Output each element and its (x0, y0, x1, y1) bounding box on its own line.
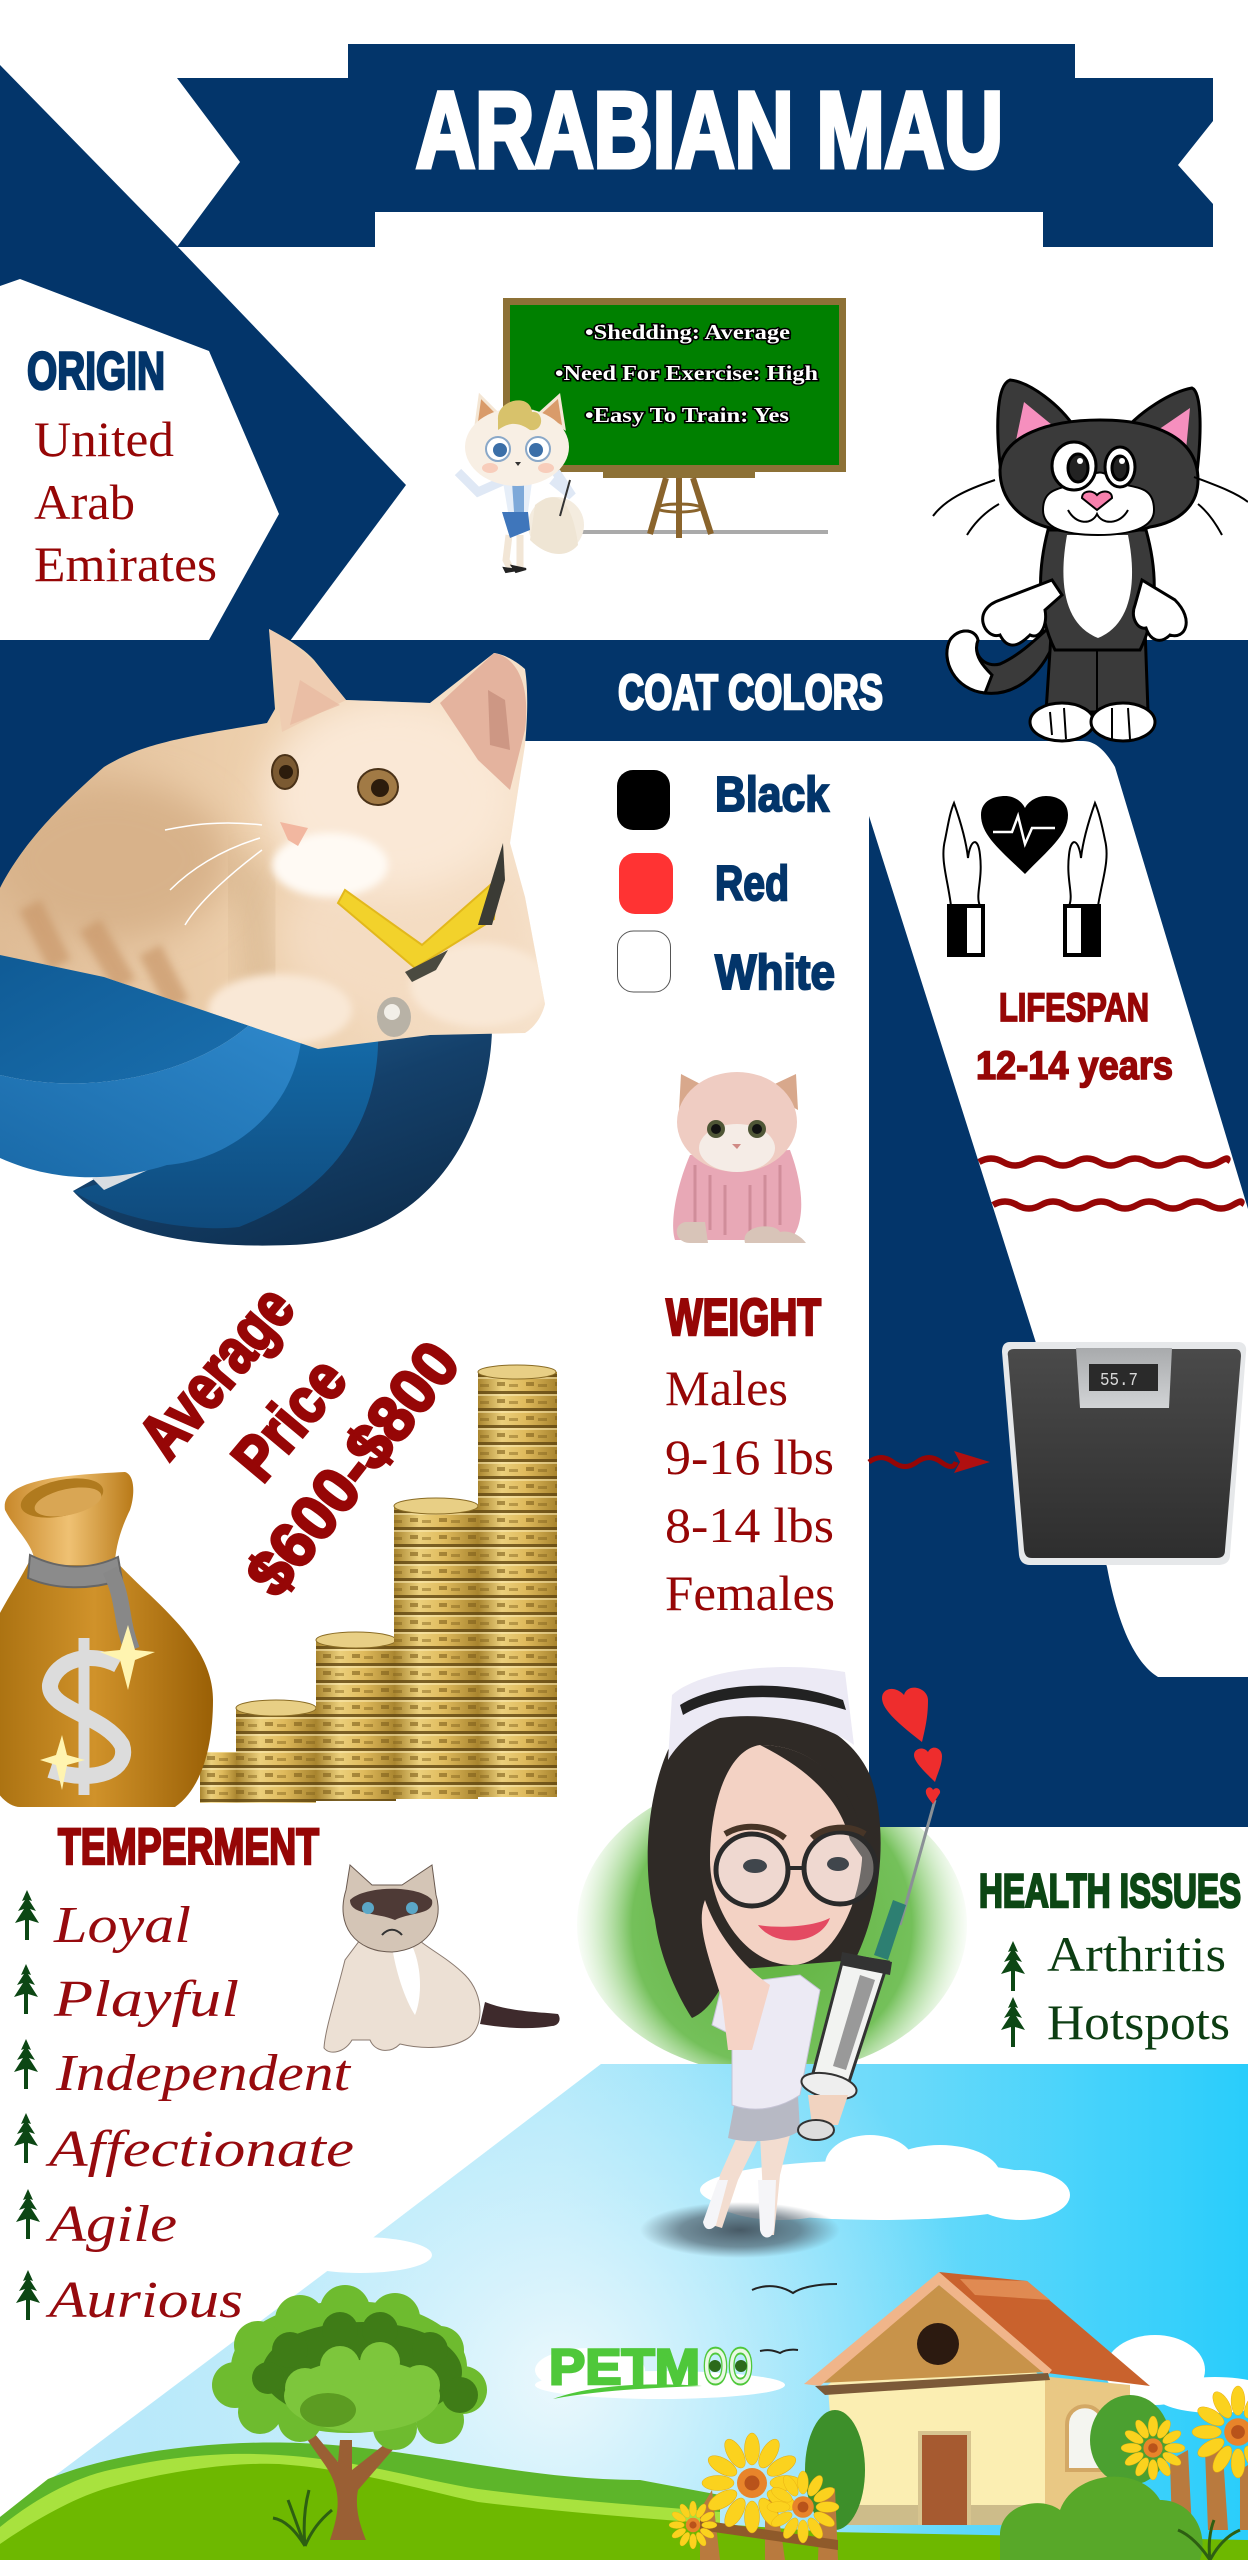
left hand (943, 803, 981, 906)
right hand (1068, 803, 1107, 906)
temperament list: Playful (53, 1971, 239, 2028)
money bag (0, 1472, 213, 1807)
easel (573, 469, 828, 538)
weight text: 8-14 lbs (665, 1497, 834, 1553)
coin stacks (200, 1365, 557, 1803)
eyes (1052, 442, 1096, 490)
temperament list: Aurious (45, 2272, 243, 2329)
head (1000, 420, 1198, 533)
logo (549, 2338, 753, 2399)
temperament list: Affectionate (45, 2121, 354, 2178)
bell (377, 997, 411, 1037)
origin heading: ORIGIN (27, 342, 165, 401)
average price text: Price (218, 1344, 360, 1494)
black and white cartoon cat (933, 380, 1248, 741)
kitten soft fur shading (0, 697, 550, 1046)
logo swoosh (553, 2384, 702, 2399)
lips (758, 1918, 830, 1940)
origin value: United (34, 411, 174, 467)
navy chevron background: origin (0, 65, 406, 645)
legs (1046, 600, 1148, 712)
title banner (177, 44, 1213, 247)
collar (338, 880, 496, 968)
torso (1041, 530, 1154, 650)
pine bullets (14, 1890, 40, 2320)
whiskers (933, 477, 1248, 535)
scale readout: 55.7 (1100, 1371, 1138, 1391)
sparkles (100, 1625, 155, 1690)
tree (212, 2285, 487, 2546)
lifespan text: LIFESPAN (999, 986, 1149, 1030)
title: ARABIAN MAU (416, 69, 1003, 190)
syringe (798, 1800, 935, 2140)
clouds (288, 2135, 1248, 2413)
dollar sign (50, 1658, 123, 1776)
hearts (882, 1688, 928, 1742)
heart (981, 796, 1068, 874)
average price text (124, 1272, 473, 1609)
white origin panel (0, 279, 279, 640)
sky background (0, 2064, 1248, 2560)
lifespan text (976, 986, 1173, 1088)
navy right panel (869, 741, 1248, 1827)
board text (555, 320, 818, 427)
swatch labels: White (715, 946, 835, 1000)
door (918, 2431, 971, 2525)
weight text (665, 1289, 835, 1621)
average price text: $600-$800 (232, 1328, 473, 1609)
blue sphere (0, 940, 492, 1246)
bathroom scale (1002, 1342, 1246, 1565)
rope (28, 1555, 122, 1587)
trunk (297, 2422, 396, 2540)
wavy arrow to scale (869, 1451, 990, 1473)
pine bullets (1001, 1941, 1025, 2047)
wavy dividers (979, 1158, 1227, 1166)
grumpy cat (324, 1865, 560, 2052)
gable (820, 2285, 1047, 2383)
tail (947, 622, 1055, 693)
crown light (212, 2285, 487, 2450)
white swatch (618, 931, 670, 992)
orange kitten photo (0, 629, 550, 1049)
glasses (716, 1834, 788, 1906)
crown mid (284, 2342, 440, 2432)
pink sweater kitten (673, 1072, 806, 1243)
daisies (669, 2386, 1248, 2549)
legs (712, 2130, 760, 2228)
kitten ears (269, 629, 346, 732)
board text: •Need For Exercise: High (555, 361, 818, 385)
temperament list: Agile (46, 2196, 177, 2253)
weight text: 9-16 lbs (665, 1429, 834, 1485)
origin text block (27, 342, 217, 592)
board text: •Easy To Train: Yes (585, 403, 789, 427)
origin value (34, 411, 217, 592)
hair (648, 1712, 881, 2018)
heart in hands icon (943, 796, 1107, 955)
black swatch (617, 770, 670, 830)
kitten eyes (272, 755, 298, 789)
skirt (728, 2096, 800, 2141)
hole (917, 2323, 959, 2365)
origin value: Emirates (34, 536, 217, 592)
shirt (712, 1975, 820, 2109)
face (710, 1745, 862, 1965)
origin value: Arab (34, 474, 135, 530)
lifespan text: 12-14 years (976, 1044, 1173, 1088)
window (1067, 2406, 1103, 2470)
logo: PETM (549, 2339, 700, 2395)
crown dark (252, 2312, 478, 2422)
roof side (939, 2272, 1150, 2386)
hills (0, 2442, 1248, 2560)
crown core (300, 2393, 356, 2427)
temperament list: Independent (55, 2045, 352, 2102)
traits: Loyal (53, 1897, 191, 1954)
teacher cat illustration (458, 396, 584, 572)
color swatches and labels (617, 768, 835, 1000)
bushes and fence (700, 2395, 1248, 2560)
house (804, 2272, 1150, 2525)
weight text: WEIGHT (666, 1289, 821, 1347)
swatch labels (715, 768, 835, 1000)
floor shadow (640, 2202, 840, 2258)
nose and mouth (1082, 492, 1112, 510)
grass tuft (273, 2490, 332, 2546)
average price text: Average (124, 1272, 308, 1472)
health issues: Hotspots (1047, 1994, 1230, 2050)
nurse halo (577, 1775, 967, 2075)
health issues: Arthritis (1047, 1926, 1226, 1982)
whiskers (165, 823, 262, 925)
paws (983, 580, 1062, 645)
grass tuft right (1178, 2520, 1240, 2560)
coat colors band (0, 640, 1248, 741)
swatch labels: Red (715, 857, 789, 911)
ears (998, 380, 1075, 480)
weight text: Males (665, 1360, 788, 1416)
health issues (979, 1864, 1241, 2050)
board text: •Shedding: Average (585, 320, 790, 344)
swatch labels: Black (715, 768, 830, 822)
temperament heading: TEMPERMENT (58, 1818, 319, 1875)
weight text: Females (665, 1565, 835, 1621)
coat colors heading: COAT COLORS (618, 666, 883, 720)
chalkboard with traits (503, 298, 846, 538)
red swatch (619, 853, 673, 914)
navy left panel behind kitten (0, 740, 260, 960)
birds (752, 2284, 837, 2353)
cap (668, 1667, 854, 1760)
kitten nose (280, 822, 308, 846)
hand on cheek (702, 1900, 770, 2050)
nurse character (640, 1667, 942, 2258)
logo eyes: OO (703, 2338, 753, 2396)
temperament list (14, 1890, 354, 2329)
